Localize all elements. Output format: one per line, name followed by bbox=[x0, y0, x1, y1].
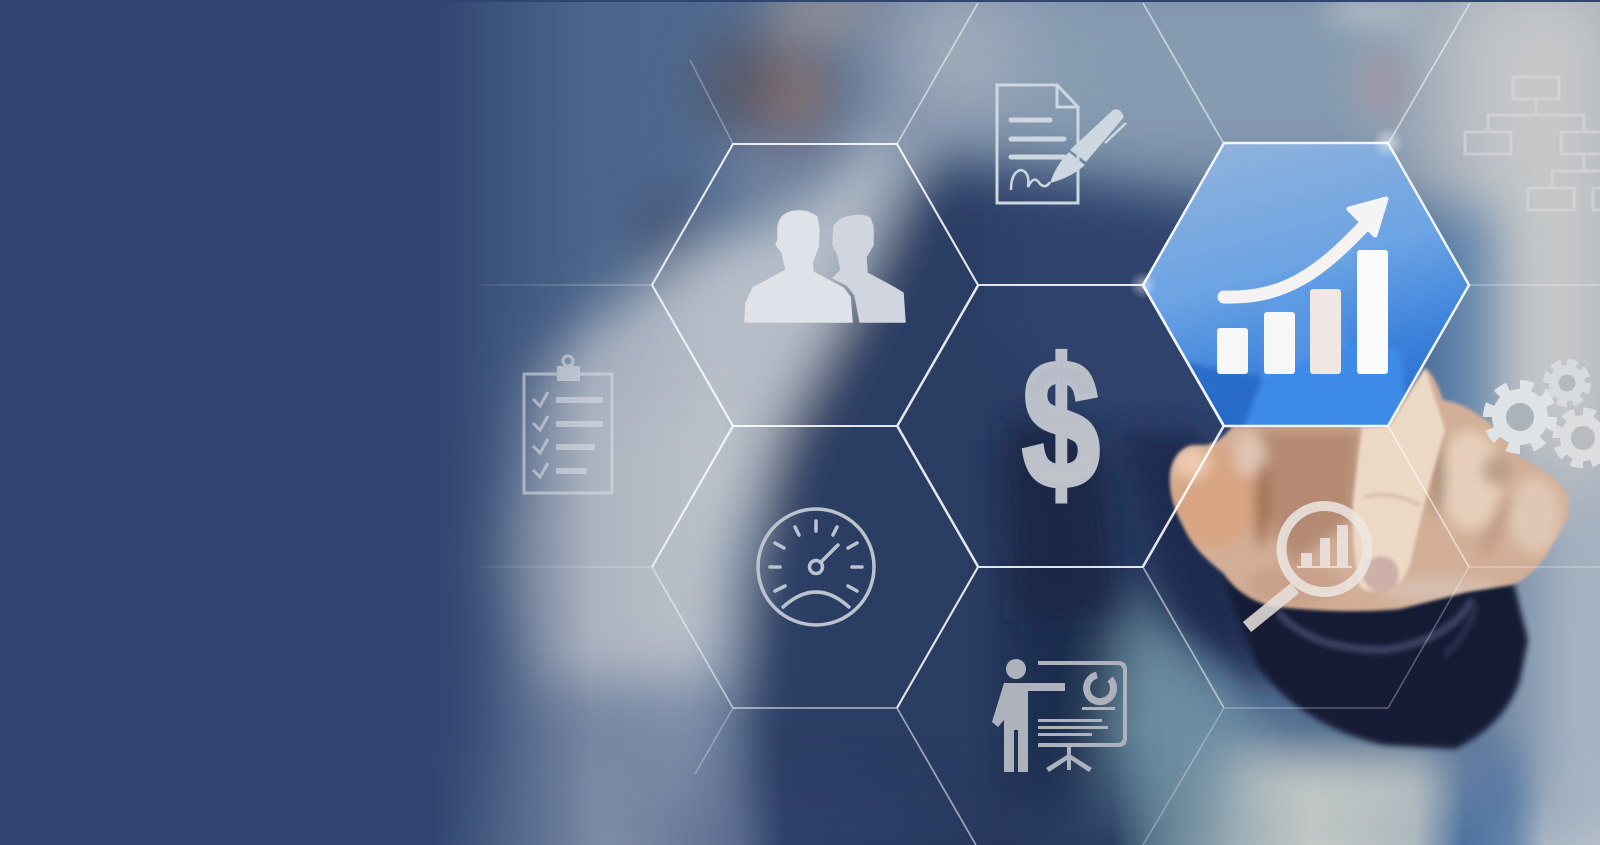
hand bbox=[1160, 360, 1580, 620]
icon: dollar sign: $ bbox=[1023, 324, 1099, 526]
sleeve bbox=[1222, 575, 1528, 749]
index finger bbox=[1353, 368, 1445, 591]
icon: growth bars and arrow bbox=[1217, 199, 1388, 374]
icon: document and pen bbox=[997, 85, 1126, 203]
navy left fade overlay bbox=[0, 0, 800, 845]
top edge strip bbox=[0, 0, 1600, 2]
icon: magnifier with bars bbox=[1247, 506, 1368, 627]
blurred photo background bbox=[452, 2, 1600, 845]
hero image panel bbox=[452, 2, 1600, 845]
icon: clipboard checklist bbox=[524, 356, 612, 493]
icon: gears bbox=[1488, 363, 1600, 464]
bright grid lines bbox=[652, 144, 1224, 708]
icon: two people bbox=[745, 211, 905, 322]
icon: org chart bbox=[1465, 77, 1600, 210]
middle grid lines bbox=[652, 3, 1470, 845]
faint outer grid lines bbox=[480, 60, 1600, 845]
icon: presenter at board bbox=[992, 659, 1127, 772]
highlighted blue hexagon bbox=[1143, 143, 1469, 430]
icon: speedometer bbox=[758, 509, 874, 625]
vertex glows bbox=[1129, 127, 1404, 299]
